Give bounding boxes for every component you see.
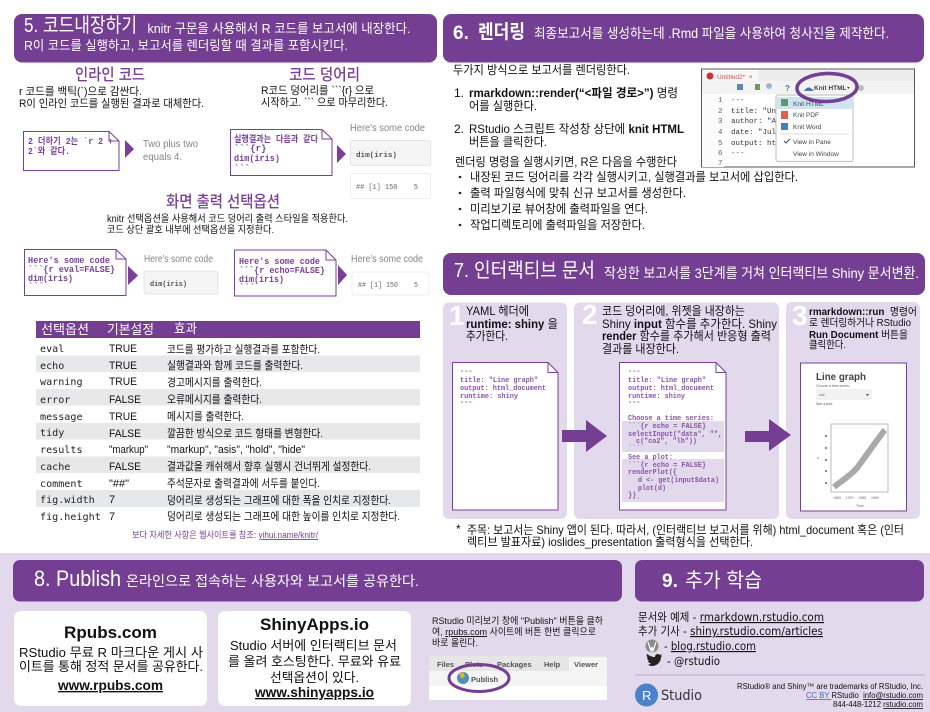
table header (36, 321, 420, 338)
heading: section 8: 8. Publish (34, 566, 121, 591)
document: echo false example: dim(iris) (239, 275, 284, 285)
document: shiny code: output: html_document (628, 385, 714, 393)
step 1 panel (443, 300, 567, 519)
heading: section 5: knitr 구문을 사용해서 R 코드를 보고서에 내장한다. (148, 21, 410, 36)
text: publish button note: 여, rpubs.com 사이트에 버튼 한번 클릭으로 (432, 626, 596, 638)
card: ShinyApps: Studio 서버에 인터랙티브 문서 (230, 638, 397, 653)
step 1 panel: 추가한다. (466, 329, 508, 343)
output: code chunk result: dim(iris) (356, 152, 397, 160)
row: echo: 실행결과와 함께 코드를 출력한다. (167, 359, 303, 372)
numbered step 1 (454, 86, 678, 113)
document: echo false example: Here's some code (239, 257, 320, 267)
row: warning (40, 376, 262, 389)
output: code chunk result: Here's some code (350, 123, 425, 134)
numbered step 2: RStudio 스크립트 작성창 상단에 knit HTML (469, 122, 684, 136)
card: ShinyApps: ShinyApps.io (260, 615, 369, 634)
document: eval false example (24, 250, 126, 296)
bullet list (459, 169, 798, 232)
arrow (337, 145, 346, 163)
document: shiny code: ``` (628, 498, 641, 506)
row: message: TRUE (109, 411, 137, 423)
numbered step 1: rmarkdown::render(“<파일 경로>”) 명령 (469, 86, 678, 100)
icon: twitter (647, 654, 662, 666)
screenshot: knit HTML button: --- (731, 97, 745, 105)
row: cache: 결과값을 캐쉬해서 향후 실행시 건너뛰게 설정한다. (167, 459, 371, 473)
text: inline code description: R이 인라인 코드를 실행된 결과로 대체한다. (19, 97, 204, 110)
card: Rpubs: Rpubs.com (64, 623, 157, 642)
numbered step 1: 1. (454, 86, 464, 100)
screenshot: knit HTML button: 5 (718, 140, 723, 148)
screenshot: knit HTML button: Knit Word (793, 124, 822, 131)
row: echo (40, 359, 303, 372)
output: code chunk result: ## [1] 150 5 (356, 184, 418, 192)
heading: section 6 (443, 14, 924, 62)
card: Rpubs: www.rpubs.com (57, 678, 163, 693)
footer credits: RStudio® and Shiny™ are trademarks of RStudio, Inc. (737, 682, 923, 691)
row: comment: "##" (109, 478, 129, 490)
screenshot: knit HTML button: date: "Jul (731, 129, 777, 137)
document: shiny code: title: "Line graph" (628, 377, 706, 385)
row: message: message (40, 412, 83, 423)
output text: two plus two (143, 139, 198, 163)
row: warning: TRUE (109, 376, 137, 388)
logo: RStudio: Studio (661, 688, 702, 704)
panel: section 7 interactive documents (443, 253, 925, 549)
bullet list: 내장된 코드 덩어리를 각각 실행시키고, 실행결과를 보고서에 삽입한다. (470, 169, 798, 184)
table header: 효과 (174, 321, 197, 336)
screenshot: shiny line graph: Line graph (816, 372, 866, 383)
row: tidy: FALSE (109, 428, 141, 440)
step 3 panel: Run Document 버튼을 (809, 329, 908, 341)
screenshot: knit HTML button: 4 (718, 129, 723, 137)
step 1 panel: runtime: shiny 을 (466, 317, 558, 331)
numbered step 1: 어를 실행한다. (469, 98, 537, 113)
document: YAML header: runtime: shiny (460, 393, 519, 401)
screenshot: publish button: Files (437, 660, 454, 669)
output: echo false result (351, 254, 429, 295)
screenshot: knit HTML button: author: "A (731, 118, 777, 126)
document: shiny code: --- (628, 368, 641, 376)
text: publish button note (432, 615, 603, 649)
row: error: FALSE (109, 394, 141, 406)
screenshot: knit HTML button: output: ht (731, 140, 776, 148)
step 2 panel: 2 (582, 299, 598, 330)
step 3 panel: 3 (792, 300, 808, 331)
row: eval: eval (40, 344, 64, 355)
logo: RStudio: R (642, 688, 651, 703)
links list: 추가 기사 - shiny.rstudio.com/articles (638, 624, 823, 638)
heading: section 6: 최종보고서를 생성하는데 .Rmd 파일을 사용하여 청사진을 제작한다. (534, 26, 889, 41)
heading: section 9: 9. (662, 571, 678, 592)
text: display options description: knitr 선택옵션을 사용해서 코드 덩어리 출력 스타일을 적용한다. (107, 212, 348, 225)
row: results: results (40, 445, 83, 456)
table header: 기본설정 (107, 322, 154, 337)
heading: section 9 (635, 560, 924, 602)
links list: - blog.rstudio.com (664, 639, 756, 653)
document: eval false example: ```{r eval=FALSE} (28, 265, 115, 275)
panel: section 6 rendering (443, 14, 924, 232)
screenshot: knit HTML button: title: "Un (731, 108, 776, 116)
arrow: step 1 to step 2 (562, 420, 607, 452)
row: eval: 코드를 평가하고 실행결과를 포함한다. (167, 342, 320, 356)
output: echo false result: ## [1] 150 5 (358, 282, 418, 290)
row: cache: FALSE (109, 461, 141, 473)
screenshot: knit HTML button: View in Pane (793, 139, 831, 146)
card: Rpubs: RStudio 무료 R 마크다운 게시 사 (19, 645, 203, 660)
screenshot: knit HTML button: Knit HTML (793, 101, 824, 108)
document: YAML header (452, 362, 558, 510)
row: comment (40, 477, 320, 490)
screenshot: shiny line graph: See a plot: (816, 402, 833, 406)
document: shiny code: }) (628, 492, 636, 500)
document: shiny code: ```{r echo = FALSE} (628, 423, 706, 431)
text: code chunk description: R코드 덩어리를 ```{r} 으로 (261, 84, 374, 97)
row: fig.width (40, 494, 391, 507)
row: tidy: 깔끔한 방식으로 코드 형태를 변형한다. (167, 426, 323, 440)
row: fig.width: fig.width (40, 495, 95, 506)
screenshot: publish button (429, 656, 607, 700)
row: cache: cache (40, 462, 70, 473)
row: eval: TRUE (109, 343, 137, 355)
heading: section 5: 5. 코드내장하기 (24, 14, 137, 37)
screenshot: shiny line graph (800, 363, 906, 511)
step 3 panel (786, 300, 920, 519)
screenshot: shiny line graph: Time (856, 504, 864, 508)
card: ShinyApps: 선택옵션이 있다. (270, 670, 359, 685)
links list: - @rstudio (667, 654, 720, 668)
document: inline example (24, 132, 119, 170)
card: ShinyApps (218, 611, 411, 706)
document: code chunk example: 실행결과는 다음과 같다 (234, 133, 319, 145)
text: display options description (107, 212, 348, 236)
document: shiny code: --- (628, 399, 641, 407)
heading: section 6: 6. (453, 23, 469, 44)
text: two ways to render: 두가지 방식으로 보고서를 렌더링한다. (453, 63, 630, 77)
row: error (40, 393, 262, 406)
numbered step 2 (454, 122, 684, 149)
document: shiny code: Choose a time series: (628, 415, 714, 423)
heading: section 7: 7. 인터랙티브 문서 (454, 259, 595, 282)
footer credits (737, 682, 923, 709)
output: eval false result (144, 254, 218, 294)
document: shiny code: d <- get(input$data) (638, 477, 719, 485)
step 2 panel: 코드 덩어리에, 위젯을 내장하는 (602, 304, 745, 318)
step 2 panel (574, 299, 779, 519)
document: shiny code: ```{r echo = FALSE} (628, 462, 706, 470)
output text: two plus two: Two plus two (143, 139, 198, 150)
screenshot: publish button: Packages (497, 660, 532, 669)
bottom band background (0, 553, 930, 712)
table header: 선택옵션 (41, 322, 89, 337)
links list: 문서와 예제 - rmarkdown.rstudio.com (638, 610, 824, 624)
screenshot: knit HTML button: Untitled2* × (717, 74, 753, 81)
arrow (128, 266, 138, 285)
heading: section 8: 온라인으로 접속하는 사용자와 보고서를 공유한다. (126, 573, 419, 589)
footer credits: 844-448-1212 rstudio.com (833, 700, 923, 709)
screenshot: knit HTML button: Knit HTML (814, 85, 847, 92)
icon: wordpress (646, 640, 658, 652)
heading: section 9: 추가 학습 (685, 569, 762, 592)
document: YAML header: --- (460, 399, 473, 407)
heading: section 7 (443, 253, 925, 295)
table: knitr options (36, 321, 420, 523)
card: Rpubs: 이트를 통해 정적 문서를 공유한다. (19, 659, 203, 674)
document: shiny code: c("co2", "lh")) (636, 438, 697, 446)
text: code chunk description: 시작하고. ``` 으로 마무리한다. (261, 95, 388, 109)
document: shiny code: renderPlot({ (628, 469, 677, 477)
row: eval (40, 342, 320, 356)
document: eval false example: Here's some code (28, 256, 110, 266)
numbered step 2: 버튼을 클릭한다. (469, 135, 547, 149)
screenshot: knit HTML button: 3 (718, 118, 723, 126)
note: output formats (456, 522, 904, 549)
panel: section 8 publish (13, 560, 622, 706)
document: shiny code (620, 362, 726, 510)
document: YAML header: --- (460, 368, 473, 376)
document: code chunk example (230, 130, 332, 176)
row: fig.height: 덩어리로 생성되는 그래프에 대한 높이를 인치로 지정한다. (167, 510, 400, 523)
screenshot: knit HTML button: 7 (718, 160, 723, 168)
screenshot: knit HTML button: 2 (718, 108, 723, 116)
step 2 panel: Shiny input 함수를 추가한다. Shiny (602, 317, 777, 331)
row: fig.width: 덩어리로 생성되는 그래프에 대한 폭을 인치로 지정한다. (167, 494, 391, 507)
subheading: code chunks: 코드 덩어리 (289, 66, 360, 84)
logo: RStudio (635, 684, 702, 706)
row: fig.height: 7 (109, 511, 115, 523)
text: inline code description: r 코드를 백틱(`)으로 감싼다. (19, 85, 142, 98)
bullet list: 미리보기로 뷰어창에 출력파일을 연다. (470, 202, 648, 216)
text: what R does: 렌더링 명령을 실행시키면, R은 다음을 수행한다 (455, 154, 677, 169)
screenshot: publish button: Help (544, 660, 561, 669)
text: display options description: 코드 상단 괄호 내부에 선택옵션을 지정한다. (107, 224, 274, 236)
screenshot: knit HTML button: Knit PDF (793, 112, 819, 119)
bullet list: 출력 파일형식에 맞춰 신규 보고서를 생성한다. (470, 186, 686, 200)
screenshot: knit HTML button (702, 69, 914, 168)
output: echo false result: Here's some code (351, 254, 423, 265)
heading: section 6: 렌더링 (478, 21, 525, 43)
heading: section 5 (14, 14, 437, 62)
text: publish button note: RStudio 미리보기 창에 "Publish" 버튼을 클하 (432, 615, 603, 627)
screenshot: publish button: Plots (465, 660, 483, 669)
card: ShinyApps: www.shinyapps.io (254, 685, 374, 700)
document: eval false example: dim(iris) (28, 274, 73, 284)
step 2 panel: render 함수를 추가해서 반응형 출력 (602, 329, 771, 343)
note: output formats: * (456, 522, 461, 536)
step 2 panel: 결과를 내장한다. (602, 342, 679, 356)
document: inline example: 2 더하기 2는 `r 2 + (28, 135, 113, 147)
document: YAML header: output: html_document (460, 385, 546, 393)
note: more details link: 보다 자세한 사항은 웹사이트를 참조: yihui.name/knitr/ (132, 530, 318, 540)
screenshot: shiny line graph: co2 (819, 393, 825, 397)
footer credits: CC BY RStudio info@rstudio.com (806, 691, 923, 700)
document: shiny code: ``` (628, 445, 641, 453)
document: echo false example: ``` (239, 283, 255, 293)
document: shiny code: See a plot: (628, 454, 673, 462)
row: cache (40, 459, 371, 473)
output text: two plus two: equals 4. (143, 152, 182, 163)
document: code chunk example: dim(iris) (234, 154, 280, 164)
step 3 panel: rmarkdown::run 명령어 (809, 306, 917, 318)
screenshot: publish button: Publish (471, 675, 499, 684)
document: inline example: 2`와 같다. (28, 145, 70, 157)
row: results (40, 444, 305, 456)
heading: section 8 (13, 560, 622, 602)
bullet list: 작업디렉토리에 출력파일을 저장한다. (470, 218, 645, 232)
card: Rpubs (14, 611, 207, 706)
row: comment: 주석문자로 출력결과에 서두를 붙인다. (167, 477, 320, 490)
panel: section 5 embed code (14, 14, 437, 540)
arrow (125, 140, 134, 158)
step 1 panel: 1 (449, 300, 465, 331)
document: shiny code: selectInput("data", "", (628, 431, 722, 439)
panel: section 9 further learning (635, 560, 925, 709)
document: YAML header: title: "Line graph" (460, 377, 538, 385)
document: code chunk example: ``` (234, 164, 250, 174)
document: code chunk example: ```{r} (234, 144, 266, 154)
row: message (40, 410, 244, 423)
document: shiny code: plot(d) (638, 485, 666, 493)
screenshot: knit HTML button: View in Window (793, 151, 839, 158)
screenshot: knit HTML button: 1 (718, 97, 723, 105)
screenshot: publish button: Viewer (574, 660, 598, 669)
text: publish button note: 바로 올린다. (432, 638, 478, 649)
row: echo: TRUE (109, 360, 137, 372)
text: inline code description (19, 85, 204, 110)
arrow (338, 265, 347, 285)
output: code chunk result (350, 123, 430, 198)
screenshot: shiny line graph: Choose a time series: (816, 384, 850, 388)
screenshot: knit HTML button: --- (731, 150, 745, 158)
arrow: step 2 to step 3 (745, 419, 791, 451)
row: results: "markup" (109, 444, 148, 456)
card: ShinyApps: 를 올려 호스팅한다. 무료와 유료 (228, 654, 401, 669)
output: eval false result: dim(iris) (150, 281, 187, 289)
row: fig.height (40, 510, 400, 523)
links list (638, 610, 824, 668)
row: error: error (40, 395, 70, 406)
row: comment: comment (40, 479, 83, 490)
document: shiny code: runtime: shiny (628, 393, 686, 401)
row: tidy: tidy (40, 428, 64, 439)
step 1 panel: YAML 헤더에 (466, 304, 529, 318)
note: output formats: 렉티브 발표자료) ioslides_presentation 출력형식을 선택한다. (467, 535, 753, 549)
document: eval false example: ``` (28, 282, 44, 292)
row: fig.height: fig.height (40, 512, 101, 523)
heading: section 5: R이 코드를 실행하고, 보고서를 렌더링할 때 결과를 포함시킨다. (24, 38, 348, 53)
screenshot: knit HTML button: 6 (718, 150, 723, 158)
row: fig.width: 7 (109, 494, 115, 506)
row: results: "markup", "asis", "hold", "hide" (167, 444, 305, 456)
numbered step 2: 2. (454, 122, 464, 136)
row: echo: echo (40, 361, 64, 372)
step 3 panel: 로 렌더링하거나 RStudio (809, 316, 911, 329)
row: error: 오류메시지를 출력한다. (167, 393, 262, 406)
subheading: display options: 화면 출력 선택옵션 (166, 193, 280, 211)
row: warning: warning (40, 377, 83, 388)
screenshot: knit HTML button: ? (785, 84, 790, 93)
screenshot: shiny line graph: 1960 1970 1980 1990 (833, 496, 879, 500)
output: eval false result: Here's some code (144, 254, 213, 265)
step 3 panel: 클릭한다. (809, 339, 846, 351)
document: echo false example (234, 250, 336, 296)
row: message: 메시지를 출력한다. (167, 410, 244, 423)
document: echo false example: ```{r echo=FALSE} (239, 266, 325, 276)
text: code chunk description (261, 84, 388, 109)
row: tidy (40, 426, 323, 440)
row: warning: 경고메시지를 출력한다. (167, 376, 262, 389)
subheading: inline code: 인라인 코드 (75, 66, 145, 84)
